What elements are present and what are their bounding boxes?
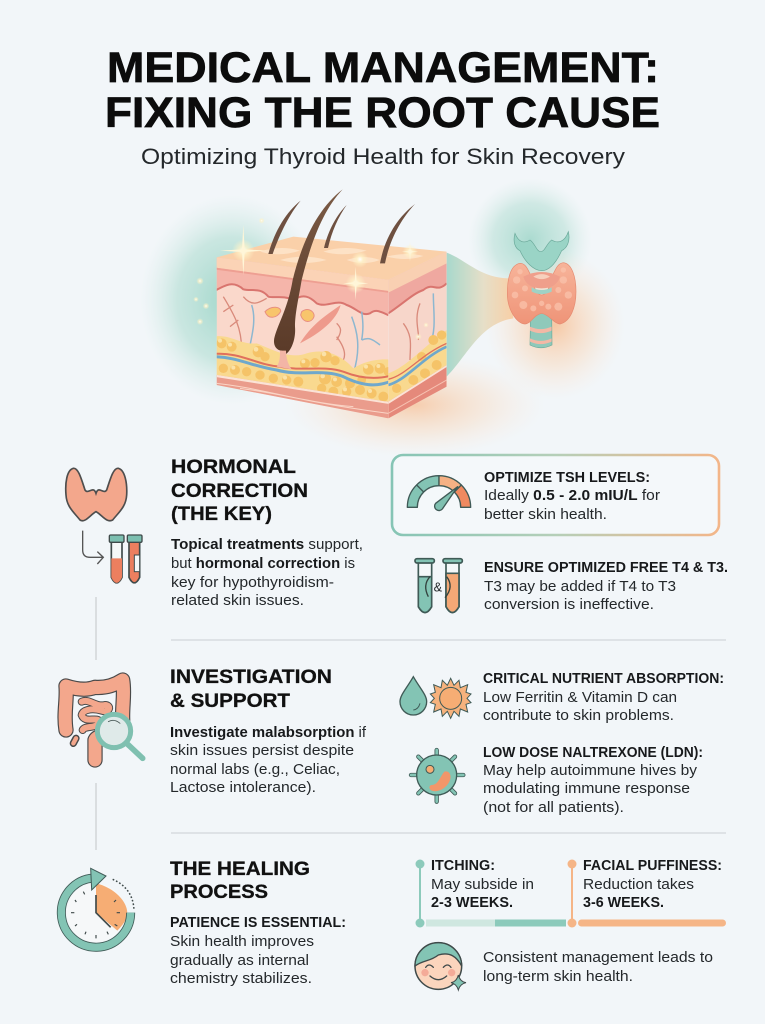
facial puffiness label — [583, 858, 722, 911]
text: LOW DOSE NALTREXONE (LDN): — [483, 745, 703, 761]
itching label: 2-3 WEEKS. — [431, 895, 513, 911]
icon: intestine with magnifier — [65, 680, 143, 760]
closing note: Consistent management leads to — [483, 950, 713, 966]
body text: normal labs (e.g., Celiac, — [170, 762, 340, 778]
title — [105, 44, 660, 137]
text: ENSURE OPTIMIZED FREE T4 & T3. — [484, 560, 728, 576]
text: modulating immune response — [483, 781, 690, 797]
icon: smiling face — [415, 943, 466, 990]
block: free T4 and T3 — [415, 559, 728, 613]
body text — [171, 537, 363, 609]
text: T3 may be added if T4 to T3 — [484, 579, 676, 595]
heading: THE HEALING — [170, 858, 310, 880]
skin block — [213, 233, 450, 423]
title: FIXING THE ROOT CAUSE — [105, 89, 660, 137]
facial puffiness label: FACIAL PUFFINESS: — [583, 858, 722, 874]
heading: INVESTIGATION — [170, 666, 332, 688]
heading: (THE KEY) — [171, 503, 272, 525]
itching label: May subside in — [431, 877, 534, 893]
facial puffiness label: 3-6 WEEKS. — [583, 895, 664, 911]
heading: PROCESS — [170, 881, 268, 903]
text: Ideally 0.5 - 2.0 mIU/L for — [484, 488, 660, 504]
text — [483, 745, 703, 816]
body text: but hormonal correction is — [171, 556, 355, 572]
body text — [170, 915, 346, 987]
facial puffiness label: Reduction takes — [583, 877, 694, 893]
body text: Skin health improves — [170, 934, 314, 950]
body text: Lactose intolerance). — [170, 780, 316, 796]
text — [483, 671, 724, 724]
heading — [170, 858, 310, 903]
body text: Investigate malabsorption if — [170, 725, 367, 741]
panel: hormonal correction — [66, 456, 363, 609]
text: May help autoimmune hives by — [483, 763, 698, 779]
itching label: ITCHING: — [431, 858, 495, 874]
callout: optimize TSH levels — [392, 455, 719, 535]
body text: related skin issues. — [171, 593, 304, 609]
chart: recovery timeline — [416, 858, 726, 928]
block: critical nutrient absorption — [400, 671, 724, 724]
subtitle: Optimizing Thyroid Health for Skin Recovery — [141, 144, 625, 169]
text: (not for all patients). — [483, 800, 624, 816]
block: low dose naltrexone — [411, 745, 703, 816]
heading — [170, 666, 332, 712]
icon: immune cell — [411, 750, 463, 802]
closing note — [483, 950, 713, 985]
body text: chemistry stabilizes. — [170, 971, 312, 987]
thyroid gland — [507, 232, 576, 348]
body text: Topical treatments support, — [171, 537, 363, 553]
icon: paired test tubes — [415, 559, 462, 612]
closing note: long-term skin health. — [483, 969, 633, 985]
text — [484, 560, 728, 613]
icon: clock with arrow — [61, 868, 134, 947]
heading: CORRECTION — [171, 480, 308, 502]
heading: HORMONAL — [171, 456, 296, 478]
body text — [170, 725, 367, 796]
panel: investigation and support — [65, 666, 367, 796]
text: contribute to skin problems. — [483, 708, 674, 724]
body text: skin issues persist despite — [170, 743, 354, 759]
illustration: skin cross-section linked to thyroid — [140, 178, 625, 457]
body text: key for hypothyroidism- — [171, 575, 334, 591]
text: conversion is ineffective. — [484, 597, 654, 613]
title: MEDICAL MANAGEMENT: — [107, 44, 659, 92]
icon: paired test tubes: & — [434, 581, 443, 595]
itching label — [431, 858, 534, 911]
text — [484, 470, 660, 523]
hairs — [268, 189, 415, 369]
icon: gauge — [407, 476, 471, 511]
text: CRITICAL NUTRIENT ABSORPTION: — [483, 671, 724, 687]
icon: drop and sun — [400, 677, 471, 718]
sparkles — [193, 218, 429, 340]
text: Low Ferritin & Vitamin D can — [483, 690, 677, 706]
icon: thyroid and test tubes — [66, 468, 142, 583]
heading: & SUPPORT — [170, 690, 290, 712]
body text: gradually as internal — [170, 953, 309, 969]
text: OPTIMIZE TSH LEVELS: — [484, 470, 650, 486]
text: better skin health. — [484, 507, 607, 523]
heading — [171, 456, 308, 525]
panel: the healing process — [61, 858, 346, 987]
body text: PATIENCE IS ESSENTIAL: — [170, 915, 346, 931]
